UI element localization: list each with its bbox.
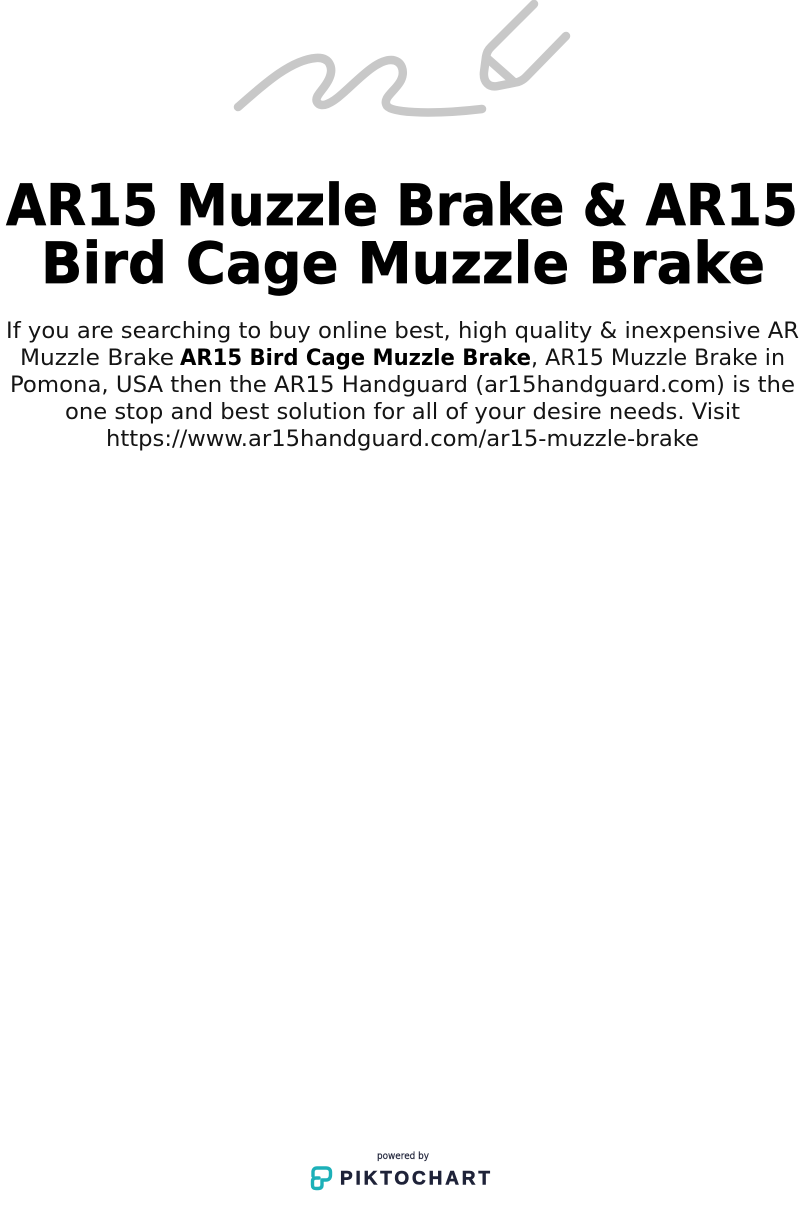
icon: Piktochart logo mark: [312, 1168, 330, 1188]
wordmark: PIKTOCHART: [340, 1168, 490, 1190]
icon: pen squiggle: [238, 4, 566, 112]
title: Bird Cage Muzzle Brake: [41, 231, 765, 297]
text block: description: AR15 Bird Cage Muzzle Brake: [180, 346, 531, 371]
text block: description: , AR15 Muzzle Brake in: [531, 346, 785, 371]
logo: powered by Piktochart: [312, 1151, 490, 1190]
powered by label: powered by: [377, 1151, 429, 1162]
text block: description: If you are searching to buy online best, high quality & inexpensive AR: [6, 319, 799, 344]
title: [6, 173, 798, 297]
text block: description: https://www.ar15handguard.com/ar15-muzzle-brake: [106, 427, 699, 452]
text block: description: [6, 319, 799, 452]
text block: description: one stop and best solution for all of your desire needs. Visit: [65, 400, 740, 425]
text block: description: Muzzle Brake: [20, 346, 174, 371]
text block: description: Pomona, USA then the AR15 Handguard (ar15handguard.com) is the: [10, 373, 795, 398]
